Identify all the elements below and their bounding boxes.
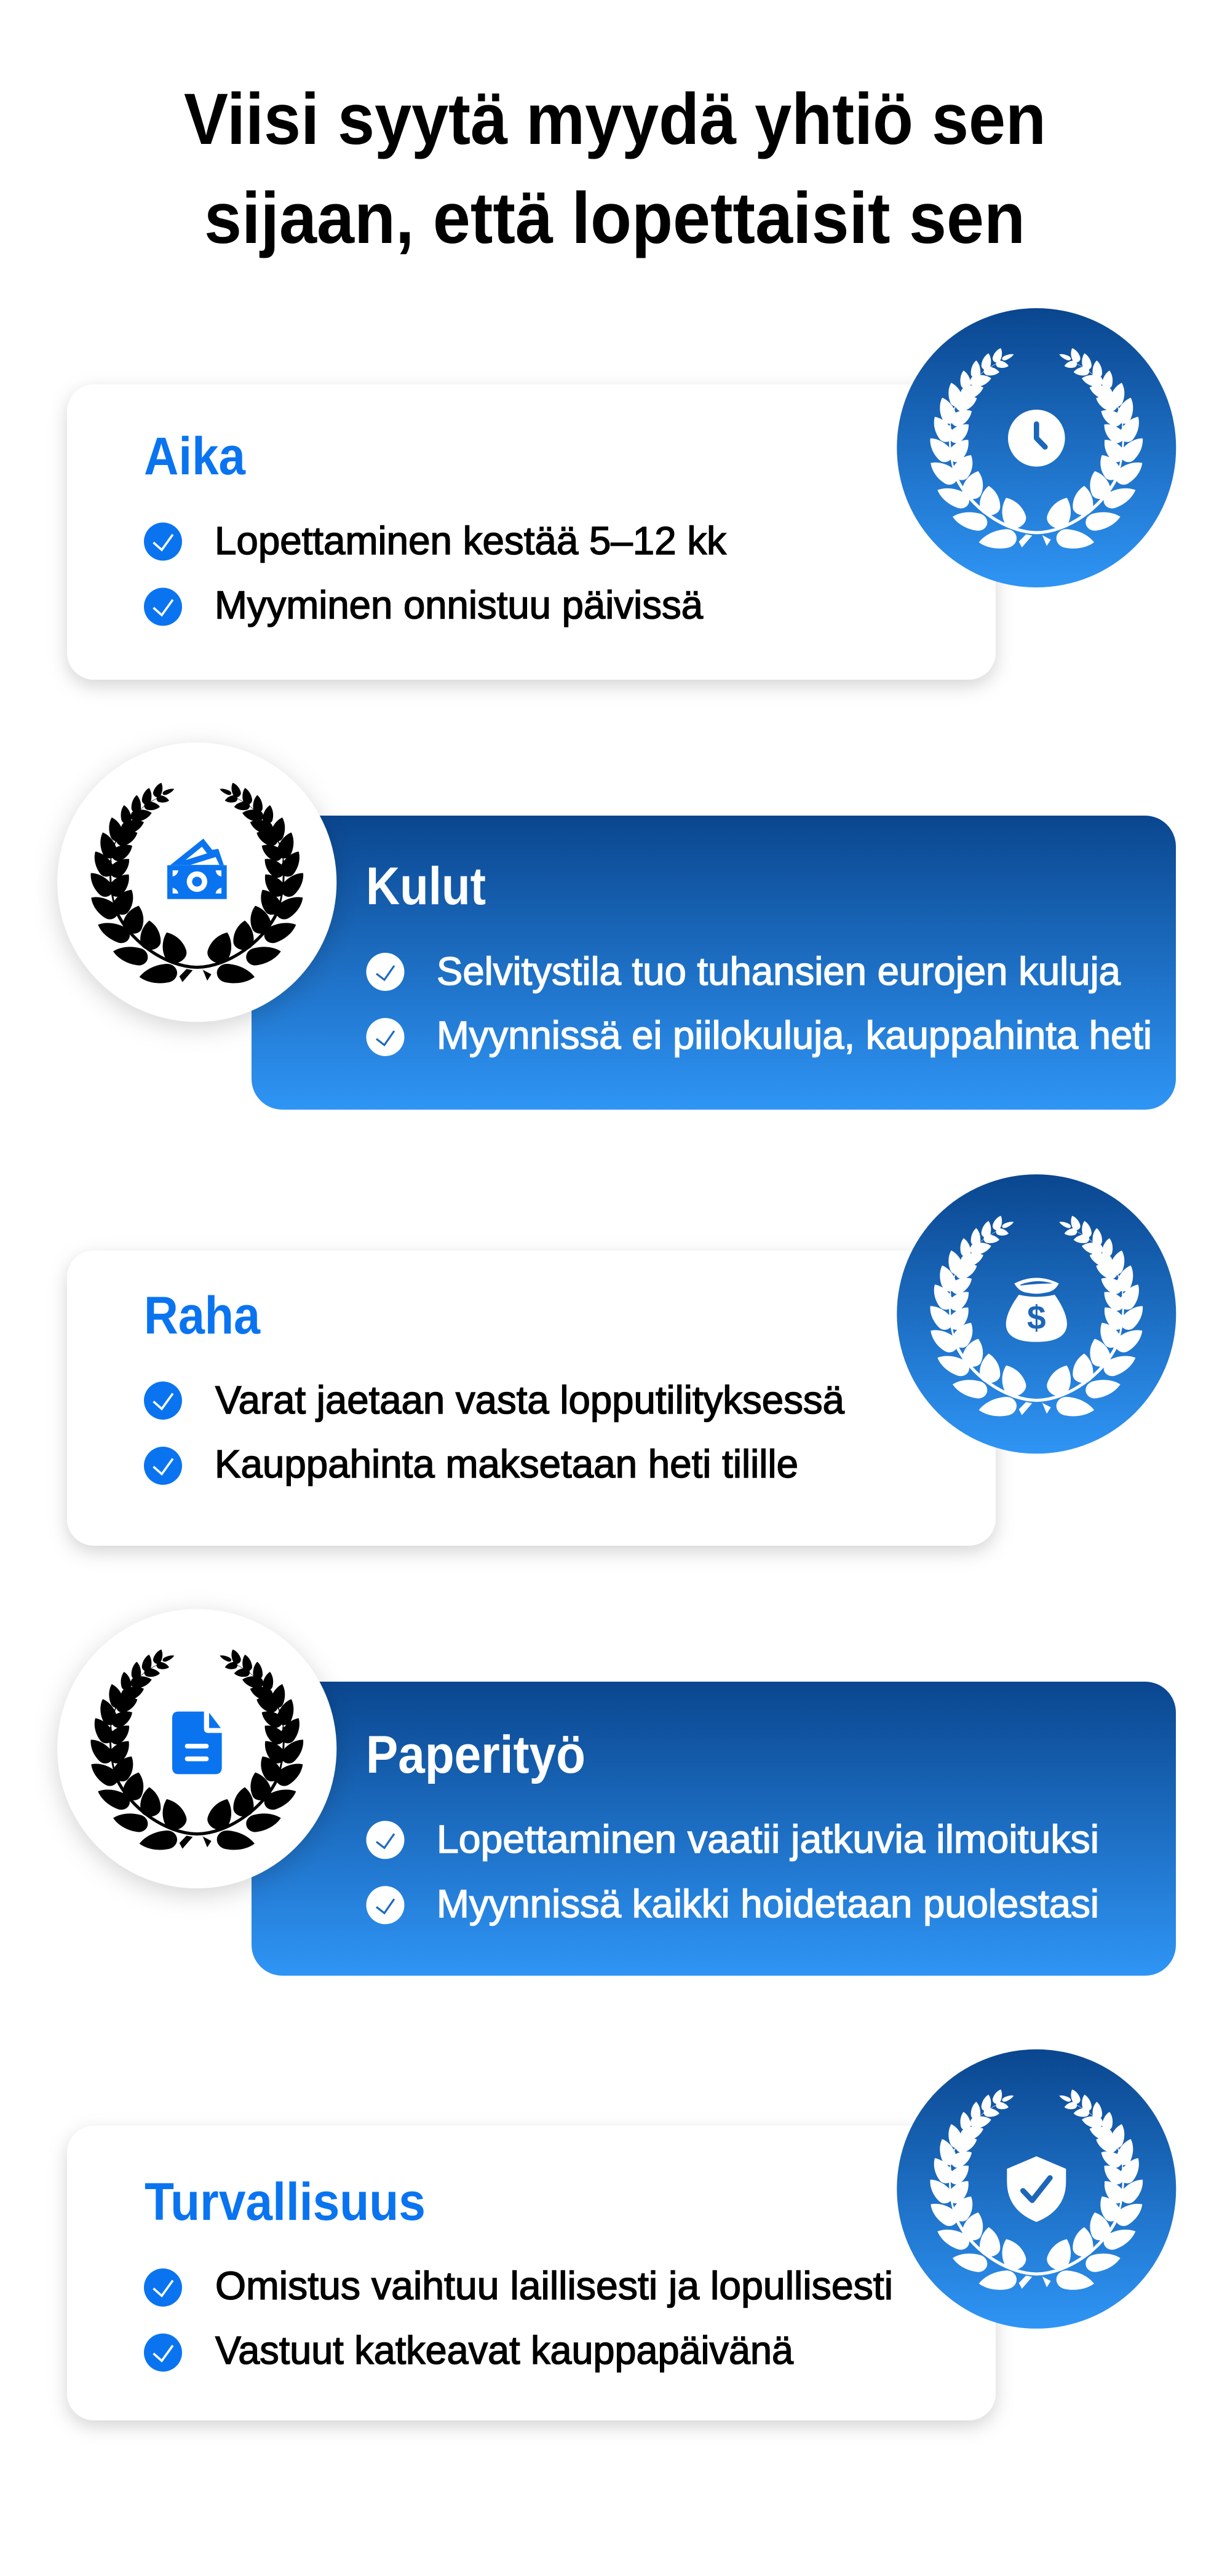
badge: banknotes in black laurel circle <box>57 742 336 1022</box>
title <box>184 79 1046 259</box>
badge: shield in blue laurel circle <box>897 2049 1176 2329</box>
panel: Kulut <box>252 816 1176 1110</box>
list row: Lopettaminen: Lopettaminen vaatii jatkuvia ilmoituksi <box>437 1817 1099 1861</box>
panel: Aika <box>67 384 996 680</box>
icon: money bag: $ <box>1027 1298 1046 1337</box>
icon: banknotes <box>167 838 227 899</box>
title: sijaan, että lopettaisit sen <box>204 178 1025 259</box>
heading: Paperityö: Paperityö <box>366 1725 585 1784</box>
badge: document in black laurel circle <box>57 1609 336 1888</box>
icon: money bag <box>1006 1278 1067 1342</box>
icon: black laurel wreath <box>85 1648 309 1853</box>
list row: Vastuut: Vastuut katkeavat kauppapäivänä <box>215 2328 793 2372</box>
title: Viisi syytä myydä yhtiö sen <box>184 79 1046 160</box>
icon: clock <box>1008 410 1065 467</box>
list row: Lopettaminen: Lopettaminen kestää 5–12 kk <box>215 519 727 563</box>
list row: Varat: Varat jaetaan vasta lopputilityksessä <box>215 1378 844 1422</box>
icon: white laurel wreath <box>924 346 1149 552</box>
list row: Kauppahinta: Kauppahinta maksetaan heti tilille <box>215 1442 798 1486</box>
heading: Turvallisuus: Turvallisuus <box>145 2173 426 2232</box>
icon: document <box>172 1712 222 1774</box>
heading: Aika: Aika <box>144 427 246 486</box>
list row: Omistus: Omistus vaihtuu laillisesti ja lopullisesti <box>215 2264 893 2308</box>
panel: Raha <box>67 1250 996 1546</box>
list row: Myynnissä: Myynnissä kaikki hoidetaan puolestasi <box>437 1882 1099 1926</box>
icon: white laurel wreath <box>924 2088 1149 2293</box>
badge: clock in blue laurel circle <box>897 308 1176 587</box>
list row: Selvitystila: Selvitystila tuo tuhansien eurojen kuluja <box>437 949 1121 993</box>
panel: Paperityö <box>252 1682 1176 1976</box>
badge: money bag in blue laurel circle <box>897 1174 1176 1453</box>
icon: black laurel wreath <box>85 781 309 986</box>
panel: Turvallisuus <box>67 2126 996 2420</box>
icon: shield <box>1007 2157 1066 2222</box>
heading: Raha: Raha <box>144 1286 261 1345</box>
icon: white laurel wreath <box>924 1214 1149 1419</box>
list row: Myynnissä: Myynnissä ei piilokuluja, kauppahinta heti <box>437 1013 1152 1057</box>
heading: Kulut: Kulut <box>366 857 486 916</box>
list row: Myyminen: Myyminen onnistuu päivissä <box>215 583 703 627</box>
